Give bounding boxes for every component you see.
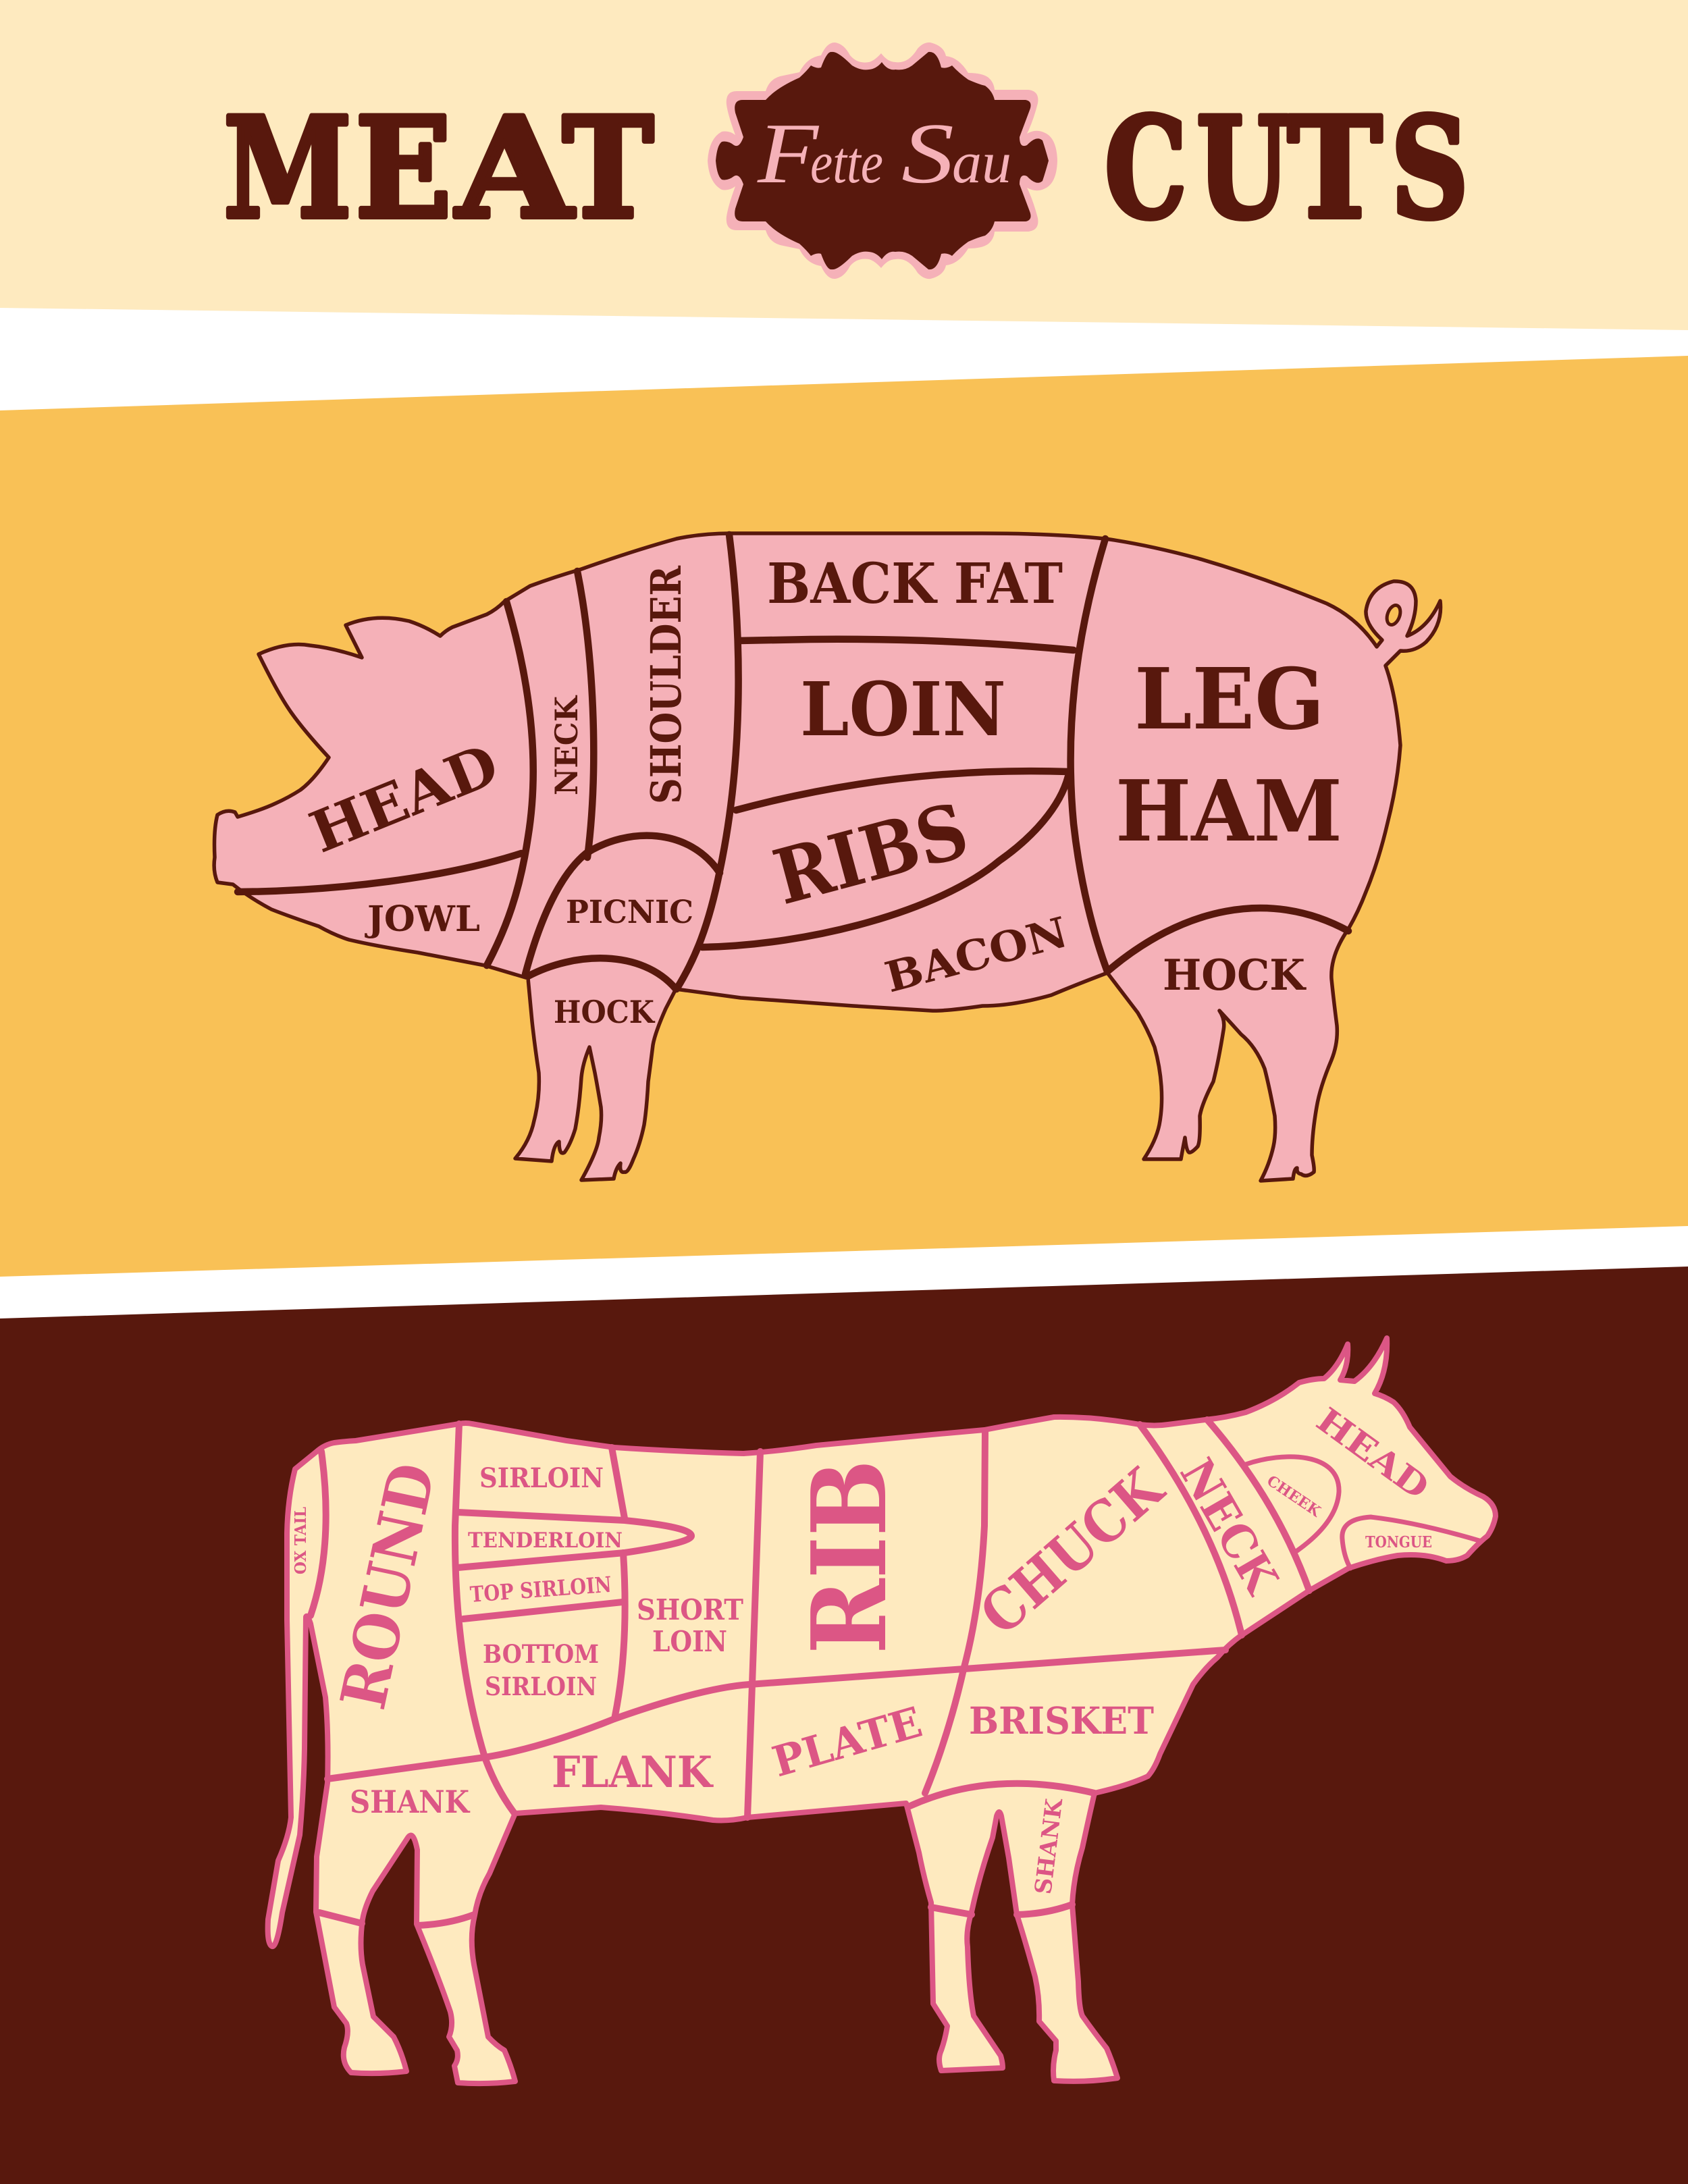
pig cut labels: HOCK — [1163, 950, 1307, 1000]
badge: Fette Sau logo: au — [952, 130, 1011, 196]
cow cut labels: PLATE — [767, 1697, 927, 1786]
pig cut labels: JOWL — [365, 899, 480, 940]
pig cut labels: LEG — [1134, 650, 1325, 749]
title word: CUTS: C — [1105, 88, 1187, 250]
pig cut labels: SHOULDER — [641, 566, 691, 804]
panel: header band — [0, 0, 1688, 330]
pig cut labels: BACON — [880, 907, 1073, 1003]
pig cut labels: HOCK — [554, 994, 656, 1030]
title word: MEAT: T — [562, 88, 654, 250]
cow cut labels: TENDERLOIN — [468, 1528, 623, 1553]
pig cut labels: BACK FAT — [767, 552, 1063, 616]
pig cut labels: RIBS — [765, 786, 977, 922]
title word: CUTS: U — [1196, 88, 1290, 250]
cow outline — [268, 1338, 1496, 2083]
cow cut labels: SHANK — [350, 1784, 471, 1820]
pig cut labels — [300, 552, 1342, 1030]
panel: cow band — [0, 1267, 1688, 2184]
cow cut labels: CHEEK — [1263, 1472, 1324, 1521]
title word: MEAT: A — [455, 88, 575, 250]
cow cut labels: LOIN — [652, 1625, 727, 1658]
cow cut labels — [292, 1400, 1436, 1896]
cow cut labels: NECK — [1169, 1449, 1290, 1604]
badge: Fette Sau logo — [708, 43, 1057, 279]
cow cut labels: SHORT — [637, 1593, 743, 1626]
title word: MEAT: E — [355, 88, 452, 250]
cow cut labels: OX TAIL — [292, 1507, 310, 1574]
cow cut labels: SIRLOIN — [485, 1672, 597, 1701]
cow cut labels: SHANK — [1030, 1796, 1068, 1896]
pig tail hole — [1384, 604, 1403, 627]
title word: MEAT: M — [223, 88, 352, 250]
title word: CUTS: S — [1391, 88, 1469, 250]
cow cut labels: CHUCK — [968, 1454, 1177, 1648]
pig cut lines — [238, 535, 1348, 989]
cow cut labels: SIRLOIN — [479, 1462, 604, 1494]
cow cut labels: BRISKET — [969, 1699, 1154, 1742]
title word: CUTS: T — [1288, 88, 1382, 250]
pig outline — [214, 533, 1441, 1181]
cow cut labels: HEAD — [1309, 1400, 1436, 1508]
pig cut labels: LOIN — [800, 666, 1006, 753]
cow cut labels: RIB — [789, 1460, 909, 1654]
pig cut labels: HAM — [1115, 762, 1342, 861]
cow cut lines — [311, 1420, 1481, 1925]
pig cut labels: NECK — [548, 695, 585, 795]
panel: pig band — [0, 356, 1688, 1277]
badge: Fette Sau logo: ette — [810, 130, 883, 196]
pig cut labels: PICNIC — [566, 894, 693, 931]
pig cut labels: HEAD — [300, 730, 507, 866]
pig diagram — [214, 533, 1441, 1181]
cow cut labels: ROUND — [327, 1457, 450, 1715]
title — [223, 88, 1469, 250]
cow cut labels: BOTTOM — [483, 1639, 599, 1669]
cow cut labels: FLANK — [552, 1747, 714, 1798]
badge: Fette Sau logo: S — [901, 105, 954, 201]
cow diagram — [268, 1338, 1496, 2083]
cow cut labels: TONGUE — [1365, 1533, 1432, 1551]
cow cut labels: TOP SIRLOIN — [469, 1572, 612, 1607]
badge: Fette Sau logo: F — [757, 105, 820, 201]
